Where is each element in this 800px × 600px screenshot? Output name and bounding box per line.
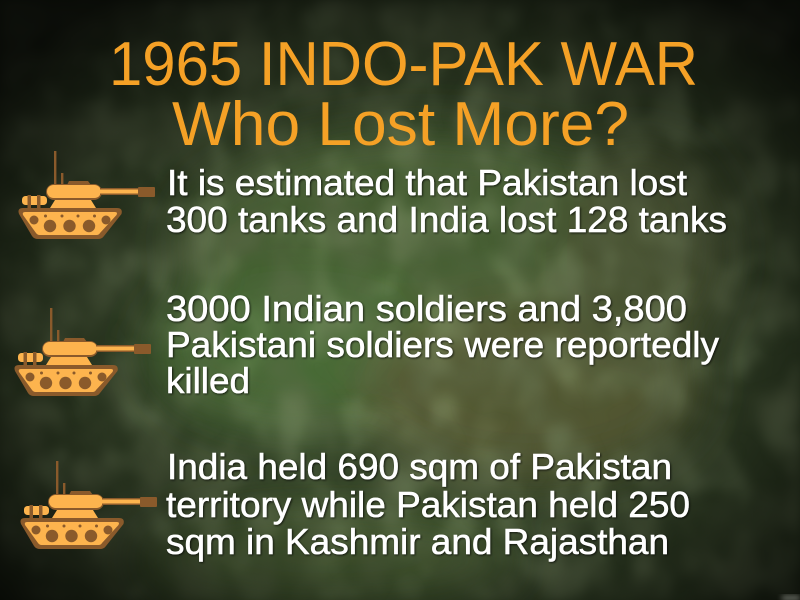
text block: tanks lost: [166, 162, 727, 240]
text block: soldiers killed: Pakistani soldiers were reportedly: [166, 324, 719, 365]
icon: tank 1: [18, 151, 155, 239]
text block: territory held: [166, 446, 690, 562]
text block: territory held: territory while Pakistan held 250: [166, 484, 690, 525]
icon: tank 3: [20, 461, 157, 549]
text block: territory held: sqm in Kashmir and Rajasthan: [166, 521, 669, 562]
text block: territory held: India held 690 sqm of Pakistan: [167, 446, 672, 487]
title: Who Lost More?: [172, 90, 629, 159]
text block: tanks lost: 300 tanks and India lost 128 tanks: [166, 199, 727, 240]
text block: soldiers killed: [166, 288, 719, 401]
icon: tank 2: [14, 308, 151, 396]
title: [109, 30, 698, 159]
text block: tanks lost: It is estimated that Pakistan lost: [167, 162, 687, 203]
title: 1965 INDO-PAK WAR: [109, 30, 698, 99]
text block: soldiers killed: killed: [166, 360, 250, 401]
text block: soldiers killed: 3000 Indian soldiers and 3,800: [166, 288, 687, 329]
